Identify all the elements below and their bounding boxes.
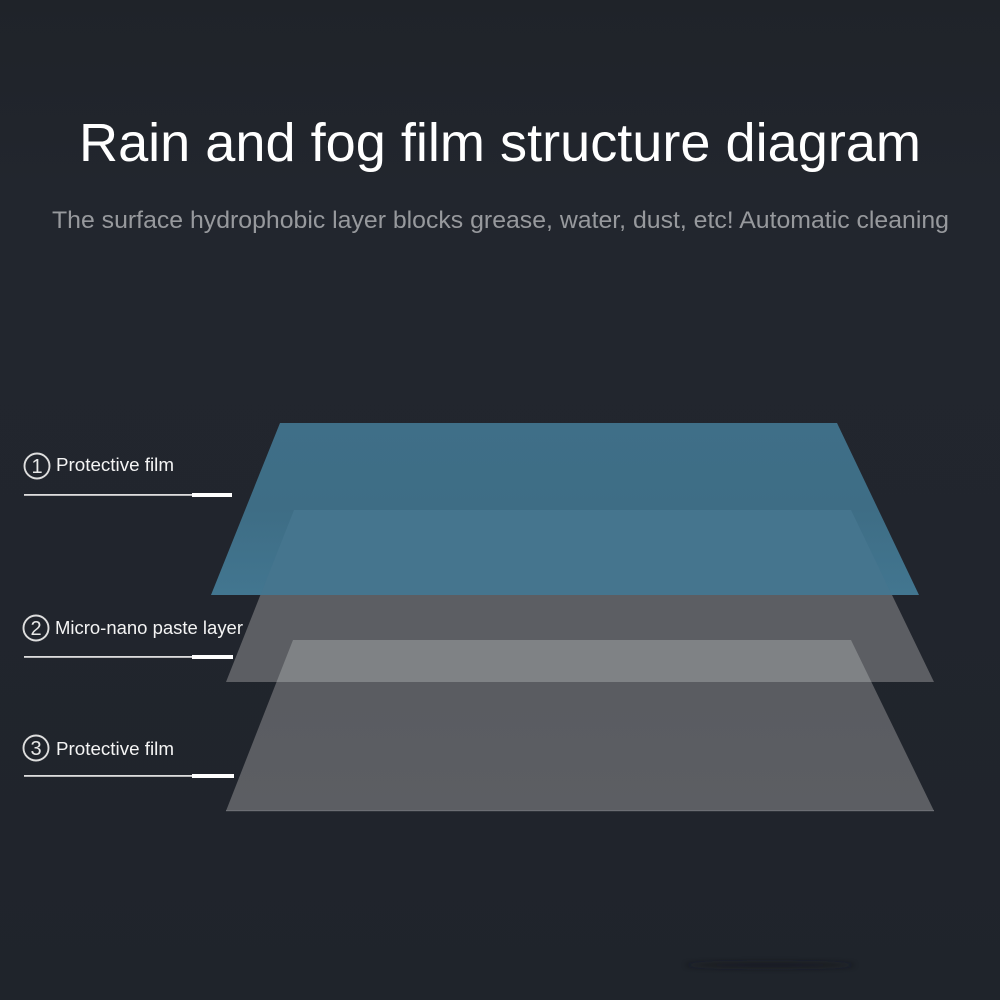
label 3: Protective film: 3 <box>30 738 42 760</box>
layer 1: upper protective film <box>211 423 919 595</box>
background streak <box>685 962 855 968</box>
overlap of layers 2 and 3 <box>276 640 871 682</box>
subtitle: The surface hydrophobic layer blocks grease, water, dust, etc! Automatic cleaning <box>52 207 949 234</box>
label 2: Micro-nano paste layer: 2 <box>30 618 42 640</box>
label 1: Protective film: Protective film <box>56 455 174 475</box>
title: Rain and fog film structure diagram <box>79 113 921 173</box>
overlap of layers 1 and 2 <box>260 510 892 595</box>
label 1: Protective film <box>24 454 232 497</box>
label 3: Protective film <box>24 736 234 778</box>
label 1: Protective film: 1 <box>31 456 43 478</box>
label 3: Protective film: Protective film <box>56 739 174 759</box>
layer 3 front edge highlight <box>226 810 934 811</box>
layer 2: micro-nano paste layer <box>226 510 934 682</box>
layer stack diagram <box>211 423 934 811</box>
label 2: Micro-nano paste layer <box>24 616 243 659</box>
label 2: Micro-nano paste layer: Micro-nano paste layer <box>55 618 243 638</box>
layer 3: lower protective film <box>226 640 934 811</box>
